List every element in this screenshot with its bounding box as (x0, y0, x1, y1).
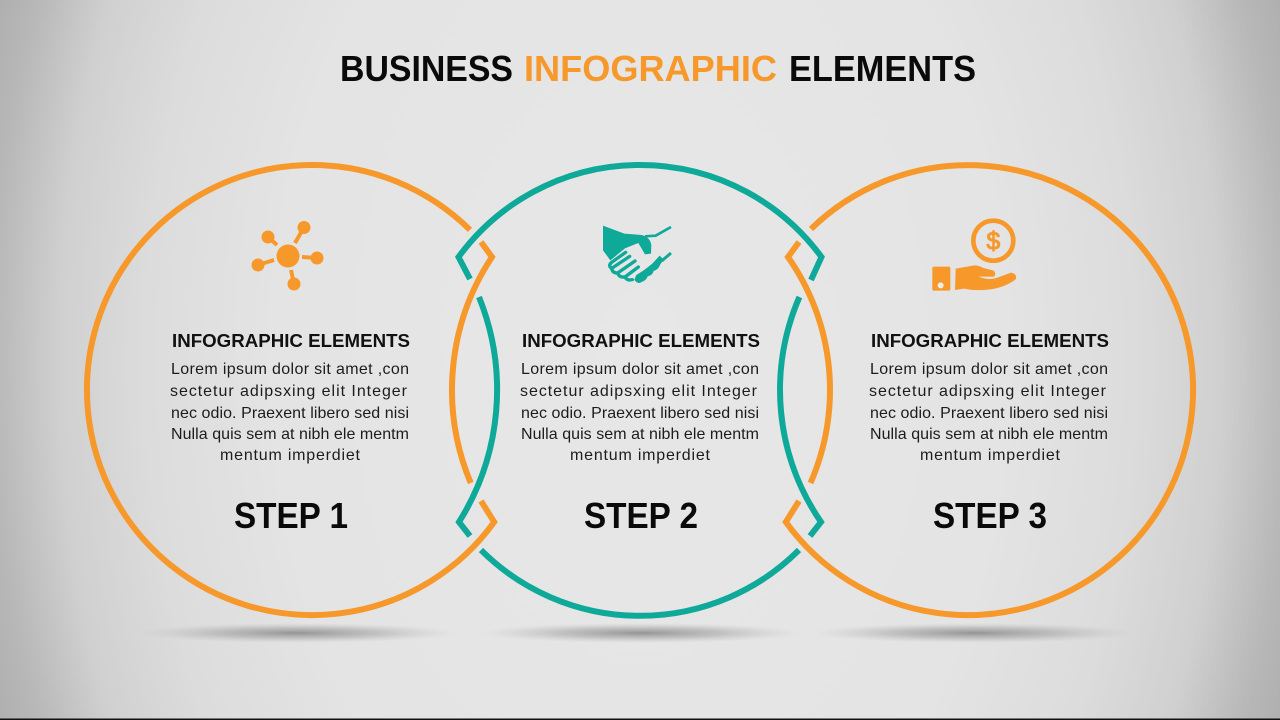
body 1: sectetur adipsxing elit Integer (170, 383, 408, 400)
body 1: Nulla quis sem at nibh ele mentm (171, 426, 409, 443)
panel: step 2 text (520, 330, 760, 536)
icon: handshake (603, 226, 671, 283)
ground shadow 1 (136, 623, 456, 643)
ring: middle teal top arc (458, 165, 822, 280)
body 3 (869, 361, 1108, 464)
title: INFOGRAPHIC (524, 48, 777, 89)
panel: step 1 text (170, 330, 410, 536)
ring: right orange circle (786, 165, 1193, 615)
body 3: sectetur adipsxing elit Integer (869, 383, 1107, 400)
heading 3: INFOGRAPHIC ELEMENTS (871, 330, 1109, 351)
title (340, 48, 976, 89)
inner arc: teal left (459, 297, 497, 536)
body 2: mentum imperdiet (570, 447, 711, 464)
step 1 label: STEP 1 (234, 495, 348, 536)
ground shadow 2 (481, 623, 801, 643)
body 2 (520, 361, 759, 464)
inner arc: teal right (780, 297, 821, 536)
body 2: sectetur adipsxing elit Integer (520, 383, 758, 400)
body 1 (170, 361, 409, 464)
inner arc: orange left (452, 242, 492, 483)
body 2: Lorem ipsum dolor sit amet ,con (521, 361, 759, 378)
body 3: nec odio. Praexent libero sed nisi (870, 405, 1108, 422)
icon: hand with coin: $ (986, 228, 1000, 255)
heading 2: INFOGRAPHIC ELEMENTS (522, 330, 760, 351)
ring: left orange circle (87, 165, 494, 615)
body 3: Nulla quis sem at nibh ele mentm (870, 426, 1108, 443)
inner arc: orange right (788, 242, 830, 483)
body 2: nec odio. Praexent libero sed nisi (521, 405, 759, 422)
body 2: Nulla quis sem at nibh ele mentm (521, 426, 759, 443)
panel: step 3 text (869, 330, 1109, 536)
title: BUSINESS (340, 48, 513, 89)
ring: middle teal bottom arc (481, 550, 799, 616)
body 3: Lorem ipsum dolor sit amet ,con (870, 361, 1108, 378)
step 3 label: STEP 3 (933, 495, 1047, 536)
icon: hand with coin (932, 221, 1016, 291)
body 1: nec odio. Praexent libero sed nisi (171, 405, 409, 422)
body 3: mentum imperdiet (920, 447, 1061, 464)
step 2 label: STEP 2 (584, 495, 698, 536)
title: ELEMENTS (789, 48, 976, 89)
ground shadow 3 (813, 623, 1137, 643)
heading 1: INFOGRAPHIC ELEMENTS (172, 330, 410, 351)
body 1: Lorem ipsum dolor sit amet ,con (171, 361, 409, 378)
icon: network (252, 221, 324, 290)
body 1: mentum imperdiet (220, 447, 361, 464)
